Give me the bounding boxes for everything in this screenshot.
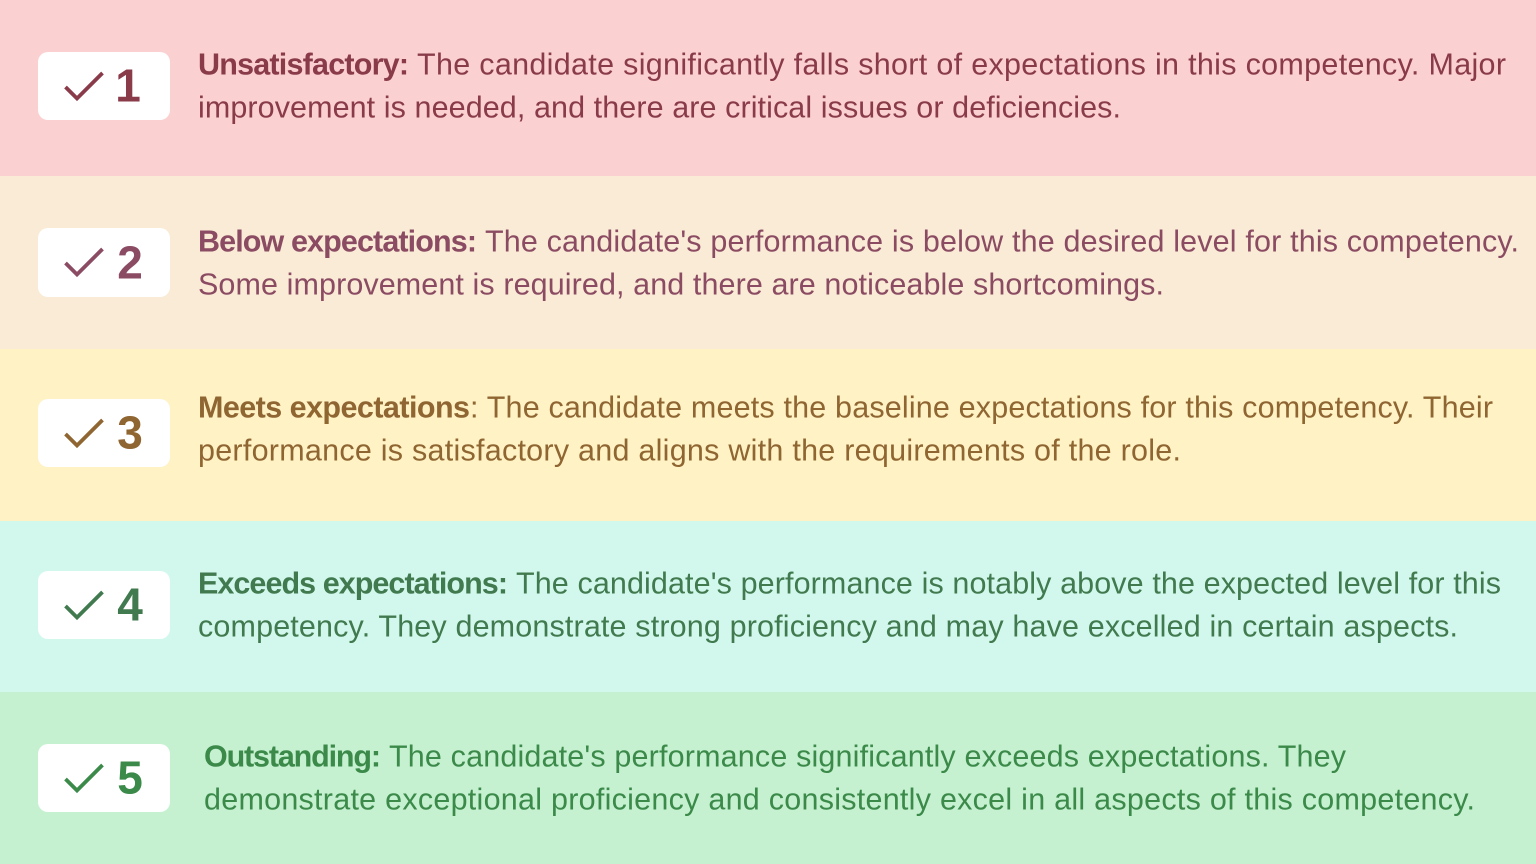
text: unsatisfactory description: improvement is needed, and there are critical issues or deficiencies. [198, 90, 1121, 124]
badge: rating 5: 5 [117, 752, 143, 804]
text: outstanding description: demonstrate exceptional proficiency and consistently excel in all aspects of this competency. [204, 782, 1475, 816]
text: outstanding description: The candidate's performance significantly exceeds expectations. They [389, 740, 1347, 774]
text: meets expectations description: performance is satisfactory and aligns with the requirements of the role. [198, 434, 1181, 468]
text: below expectations description: Some improvement is required, and there are noticeable shortcomings. [198, 268, 1164, 302]
panel: rating 2 below expectations [0, 176, 1536, 349]
text: exceeds expectations description [198, 566, 1501, 644]
text: unsatisfactory description [198, 48, 1506, 124]
text: exceeds expectations description: competency. They demonstrate strong proficiency and may have excelled in certain aspects. [198, 610, 1458, 644]
text: outstanding description: Outstanding: [204, 740, 381, 774]
badge: rating 2 [38, 228, 170, 297]
panel: rating 5 outstanding [0, 692, 1536, 864]
panel: rating 1 unsatisfactory [0, 0, 1536, 176]
text: below expectations description: The candidate's performance is below the desired level for this competency. [485, 224, 1519, 258]
badge: rating 1 [38, 52, 170, 120]
badge: rating 4: 4 [117, 578, 143, 630]
text: meets expectations description: Meets expectations [198, 390, 470, 424]
text: unsatisfactory description: The candidate significantly falls short of expectations in this competency. Major [417, 48, 1506, 82]
badge: rating 1: 1 [115, 60, 141, 112]
badge: rating 3: 3 [117, 406, 143, 458]
text: exceeds expectations description: The candidate's performance is notably above the expected level for this [516, 566, 1501, 600]
badge: rating 5 [38, 744, 170, 812]
text: outstanding description [204, 740, 1475, 816]
badge: rating 3 [38, 399, 170, 467]
text: below expectations description: Below expectations: [198, 224, 477, 258]
text: unsatisfactory description: Unsatisfactory: [198, 48, 409, 82]
panel: rating 3 meets expectations [0, 349, 1536, 521]
text: below expectations description [198, 224, 1519, 302]
badge: rating 2: 2 [117, 236, 143, 288]
badge: rating 4 [38, 571, 170, 639]
text: exceeds expectations description: Exceeds expectations: [198, 566, 508, 600]
text: meets expectations description [198, 390, 1493, 468]
panel: rating 4 exceeds expectations [0, 521, 1536, 692]
text: meets expectations description: : The candidate meets the baseline expectations for this competency. Their [470, 390, 1493, 424]
